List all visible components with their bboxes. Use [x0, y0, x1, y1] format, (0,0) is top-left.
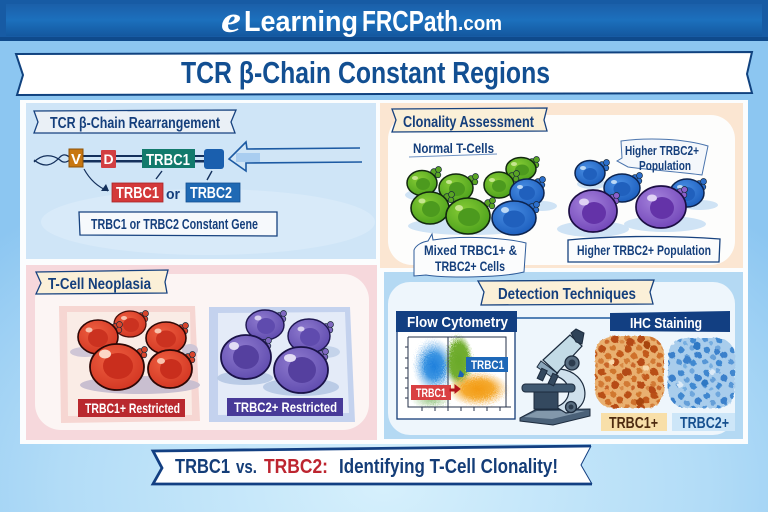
IHC staining: IHC Staining: [630, 315, 702, 332]
heading: rearrangement: TCR β-Chain Rearrangement: [50, 115, 221, 132]
panel: clonality: [380, 103, 743, 268]
label: higher TRBC2 population: [568, 236, 720, 262]
cell group: higher TRBC2: [557, 160, 718, 237]
heading: detection: [478, 280, 654, 305]
title ribbon: TCR β-Chain Constant Regions: [181, 55, 550, 90]
TRBC1 segment: TRBC1: [146, 152, 190, 169]
flow cytometry: Flow Cytometry: [407, 314, 509, 331]
title ribbon: [16, 52, 752, 95]
D segment: [101, 150, 116, 168]
bottom ribbon: [153, 446, 592, 485]
sub-panel: TRBC1 restricted: [59, 306, 200, 423]
heading: rearrangement: [34, 110, 236, 133]
label: higher TRBC2 population: Higher TRBC2+ Population: [577, 242, 711, 258]
label: red TRBC1: TRBC1: [416, 388, 446, 400]
callout: mixed cells: TRBC2+ Cells: [435, 258, 505, 274]
label: TRBC1+ restricted: TRBC1+ Restricted: [85, 400, 180, 416]
normal T-cells label: Normal T-Cells: [413, 140, 494, 156]
TRBC2 segment: [204, 149, 224, 169]
panel: detection: [384, 272, 743, 439]
arrow: [229, 142, 362, 171]
label: TRBC1: TRBC1: [116, 185, 159, 202]
label: TRBC1+ restricted: [78, 399, 185, 417]
callout: mixed cells: [414, 234, 526, 277]
heading: clonality: [392, 108, 547, 132]
tissue: blue: [668, 338, 735, 408]
V segment: [69, 149, 83, 168]
header bar: [0, 0, 768, 41]
callout: higher TRBC2 population: Higher TRBC2+: [625, 143, 699, 158]
heading: detection: Detection Techniques: [498, 286, 636, 303]
tissue: orange: [595, 336, 664, 408]
heading: neoplasia: T-Cell Neoplasia: [48, 276, 151, 293]
label: TRBC2+: TRBC2+: [680, 415, 729, 432]
flow cytometry: [396, 311, 517, 419]
heading: neoplasia: [36, 270, 168, 294]
sub-panel: TRBC2 restricted: [209, 307, 355, 422]
main white card: [20, 100, 748, 444]
site logo text: .com: [458, 13, 502, 35]
callout: higher TRBC2 population: [617, 139, 708, 175]
V segment: V: [71, 151, 81, 168]
callout: mixed cells: Mixed TRBC1+ &: [424, 242, 517, 258]
IHC staining: [595, 311, 735, 432]
gene diagram: [34, 149, 224, 191]
label: blue TRBC1: TRBC1: [471, 360, 505, 372]
icon: microscope: [520, 329, 590, 425]
panel: TCR rearrangement: [26, 103, 376, 259]
D segment: D: [103, 151, 114, 167]
caption: [79, 212, 277, 236]
scatter plot: [405, 334, 511, 411]
bottom ribbon: TRBC2:: [264, 456, 328, 478]
label: TRBC1+: TRBC1+: [609, 415, 658, 432]
callout: higher TRBC2 population: Population: [639, 158, 691, 173]
site logo text: [221, 0, 502, 41]
bottom ribbon: TRBC1: [175, 456, 230, 478]
bottom ribbon: Identifying T-Cell Clonality!: [339, 456, 558, 478]
label: TRBC2+ restricted: TRBC2+ Restricted: [234, 399, 337, 415]
site logo text: e: [221, 0, 241, 41]
arrow: red: [450, 385, 460, 393]
label: TRBC2: TRBC2: [190, 185, 232, 202]
connectors: [84, 169, 108, 191]
caption: TRBC1 or TRBC2 Constant Gene: [91, 217, 258, 233]
text: or: or: [166, 186, 180, 203]
heading: clonality: Clonality Assessment: [403, 114, 535, 131]
cell group: mixed: [405, 156, 557, 235]
bottom ribbon: vs.: [236, 457, 257, 477]
site logo text: Learning: [244, 6, 358, 38]
panel: neoplasia: [26, 265, 377, 440]
site logo text: FRCPath: [362, 6, 458, 38]
